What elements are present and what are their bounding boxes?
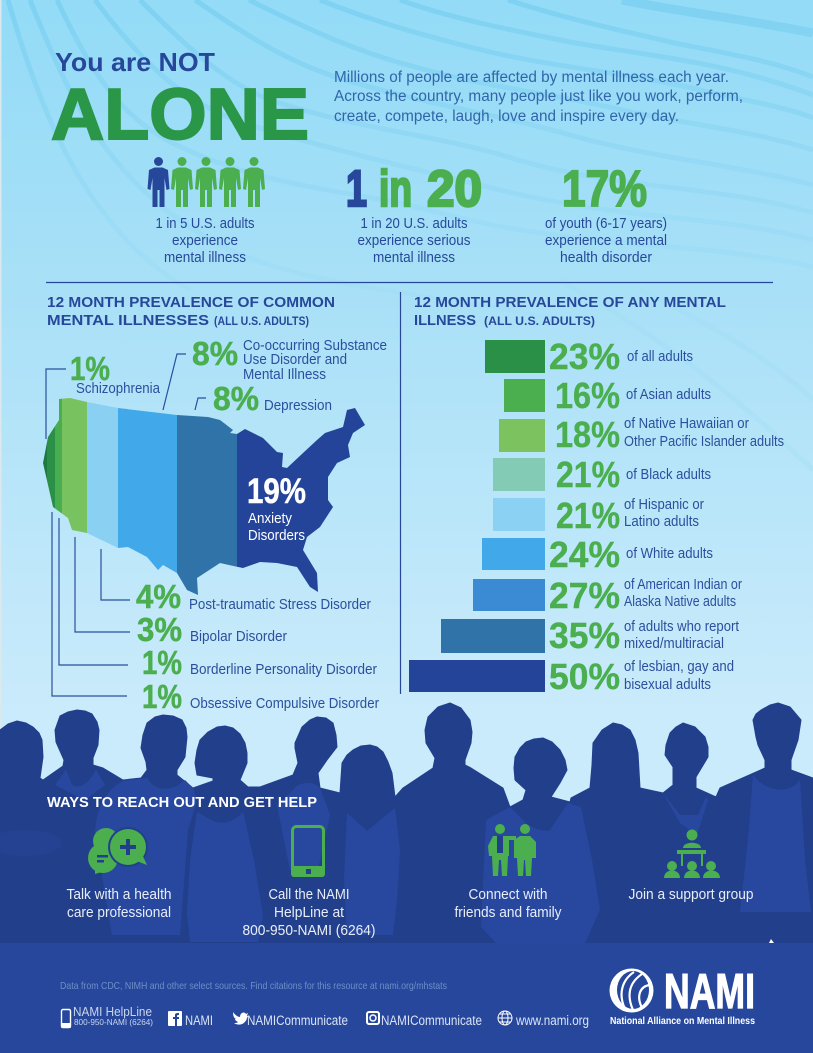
group labels: of Native Hawaiian or: [624, 416, 749, 432]
stat text: [358, 215, 470, 266]
heading: common mental illnesses: 12 MONTH PREVALENCE OF COMMON: [47, 295, 335, 311]
intro paragraph: Across the country, many people just like you work, perform,: [334, 88, 743, 105]
NAMI logo: NAMI: [664, 965, 755, 1019]
heading: common mental illnesses: MENTAL ILLNESSES: [47, 313, 209, 329]
help text: [454, 886, 562, 921]
callout: bipolar: 3%: [137, 611, 182, 648]
callout: OCD: Obsessive Compulsive Disorder: [190, 695, 379, 712]
map callout: anxiety: 19%: [247, 472, 306, 511]
map: prevalence by illness: [43, 398, 365, 595]
contact: facebook: [168, 1011, 213, 1028]
callout: borderline: [142, 644, 377, 681]
callout: co-occurring: Co-occurring Substance: [243, 337, 387, 354]
big number: [346, 160, 482, 217]
big number: 20: [427, 160, 482, 217]
source note: Data from CDC, NIMH and other select sources. Find citations for this resource at nami.org/mhstats: [60, 980, 447, 992]
bar chart: any mental illness by group: [409, 336, 784, 697]
callout: PTSD: Post-traumatic Stress Disorder: [189, 596, 371, 613]
callout: bipolar: [137, 611, 287, 648]
stat text: 1 in 20 U.S. adults: [360, 215, 468, 232]
stat: 17%: [545, 160, 667, 266]
help: support group: [628, 830, 754, 903]
contact: website: www.nami.org: [515, 1013, 589, 1028]
callout: depression: [213, 380, 332, 417]
contact: website: [498, 1011, 589, 1028]
dark crowd: [0, 703, 813, 944]
heading: any mental illness: ILLNESS: [414, 313, 476, 329]
heading: any mental illness: (ALL U.S. ADULTS): [484, 314, 595, 328]
callout: co-occurring: Mental Illness: [243, 366, 326, 383]
bars: [409, 340, 545, 692]
percentages: 21%: [556, 495, 620, 536]
map callout: anxiety: Anxiety: [248, 510, 292, 527]
stat text: [156, 215, 254, 266]
group labels: of White adults: [626, 546, 713, 562]
callout: schizophrenia: 1%: [70, 350, 110, 387]
contact: facebook: NAMI: [185, 1013, 213, 1028]
callout: schizophrenia: [70, 350, 161, 397]
contact: twitter: NAMICommunicate: [247, 1013, 348, 1028]
footer band: [0, 943, 813, 1053]
group labels: of Asian adults: [626, 387, 711, 403]
callout: PTSD: 4%: [136, 578, 181, 615]
big number: 17%: [562, 160, 647, 217]
map callout: anxiety: [247, 472, 306, 544]
icon: chat bubbles: [88, 827, 148, 874]
map leader lines: [46, 354, 206, 696]
callout: borderline: 1%: [142, 644, 182, 681]
icon: two people: [488, 824, 536, 876]
help text: care professional: [67, 904, 171, 921]
icon: phone: [291, 826, 325, 877]
help text: [242, 886, 376, 939]
percentages: [549, 336, 620, 697]
stat text: health disorder: [560, 249, 652, 266]
map callout: anxiety: Disorders: [248, 527, 305, 544]
NAMI logo: National Alliance on Mental Illness: [610, 1015, 755, 1027]
group labels: [624, 349, 784, 693]
intro paragraph: create, compete, laugh, love and inspire every day.: [334, 108, 679, 125]
big number: 1: [346, 160, 367, 217]
group labels: of American Indian or: [624, 577, 742, 593]
contact: instagram: NAMICommunicate: [381, 1013, 482, 1028]
percentages: 50%: [549, 656, 620, 697]
contact: helpline: NAMI HelpLine: [73, 1005, 152, 1019]
help text: 800-950-NAMI (6264): [242, 922, 376, 939]
group labels: Alaska Native adults: [624, 594, 736, 610]
callout: bipolar: Bipolar Disorder: [190, 628, 287, 645]
help text: Call the NAMI: [268, 886, 350, 903]
percentages: 23%: [549, 336, 620, 377]
group labels: of Hispanic or: [624, 497, 704, 513]
stat text: 1 in 5 U.S. adults: [156, 215, 254, 232]
group labels: of lesbian, gay and: [624, 659, 734, 675]
help text: HelpLine at: [274, 904, 345, 921]
stat text: of youth (6-17 years): [545, 215, 667, 232]
stat text: mental illness: [164, 249, 246, 266]
callout: depression: 8%: [213, 380, 259, 417]
callout: co-occurring: 8%: [192, 335, 238, 372]
group labels: of Black adults: [626, 467, 711, 483]
NAMI logo: [610, 965, 755, 1027]
callout: borderline: Borderline Personality Disorder: [190, 661, 377, 678]
help: health care professional: [66, 827, 172, 921]
help: helpline: [242, 826, 376, 939]
lighter clothing: [55, 770, 811, 943]
group labels: Other Pacific Islander adults: [624, 434, 784, 450]
callout: OCD: 1%: [142, 678, 182, 715]
silhouettes of people: [0, 703, 813, 944]
callout: schizophrenia: Schizophrenia: [76, 380, 161, 397]
callout: PTSD: [136, 578, 371, 615]
help text: Join a support group: [628, 886, 754, 903]
big number: in: [379, 160, 412, 217]
callout: depression: Depression: [264, 397, 332, 414]
logo swirl: [610, 968, 654, 1012]
group labels: mixed/multiracial: [624, 636, 724, 652]
help text: Connect with: [468, 886, 548, 903]
contact: helpline: [61, 1005, 153, 1028]
help: friends and family: [454, 824, 562, 921]
heading: any mental illness: 12 MONTH PREVALENCE OF ANY MENTAL: [414, 295, 726, 311]
percentages: 21%: [556, 454, 620, 495]
heading: any mental illness: [414, 295, 726, 329]
percentages: 27%: [549, 575, 620, 616]
group labels: bisexual adults: [624, 677, 711, 693]
icon: group at table: [664, 830, 720, 878]
callout: OCD: [142, 678, 379, 715]
stat text: [545, 215, 667, 266]
stat text: experience: [172, 232, 238, 249]
help text: friends and family: [454, 904, 562, 921]
heading: common mental illnesses: [47, 295, 335, 329]
stat text: experience a mental: [545, 232, 667, 249]
percentages: 24%: [549, 534, 620, 575]
stat: 1 in 5: [148, 157, 265, 266]
group labels: Latino adults: [624, 514, 699, 530]
heading: ways to reach out: WAYS TO REACH OUT AND GET HELP: [47, 795, 317, 811]
group labels: of adults who report: [624, 619, 739, 635]
intro paragraph: [334, 69, 743, 125]
stat text: mental illness: [373, 249, 455, 266]
intro paragraph: Millions of people are affected by mental illness each year.: [334, 69, 729, 86]
contact: helpline: 800-950-NAMI (6264): [74, 1018, 153, 1027]
help text: Talk with a health: [66, 886, 172, 903]
help text: [66, 886, 172, 921]
title: You are NOT: [55, 47, 215, 77]
heading: common mental illnesses: (ALL U.S. ADULTS): [214, 314, 309, 328]
title: ALONE: [51, 75, 309, 155]
faint sleeve: [0, 830, 62, 856]
percentages: 16%: [555, 375, 620, 416]
stat: 1 in 20: [346, 160, 482, 266]
group labels: of all adults: [627, 349, 693, 365]
percentages: 18%: [555, 414, 620, 455]
stat text: experience serious: [358, 232, 470, 249]
icon: five people: [148, 157, 265, 207]
percentages: 35%: [549, 615, 620, 656]
callout: co-occurring: Use Disorder and: [243, 351, 347, 368]
callout: co-occurring: [192, 335, 387, 383]
